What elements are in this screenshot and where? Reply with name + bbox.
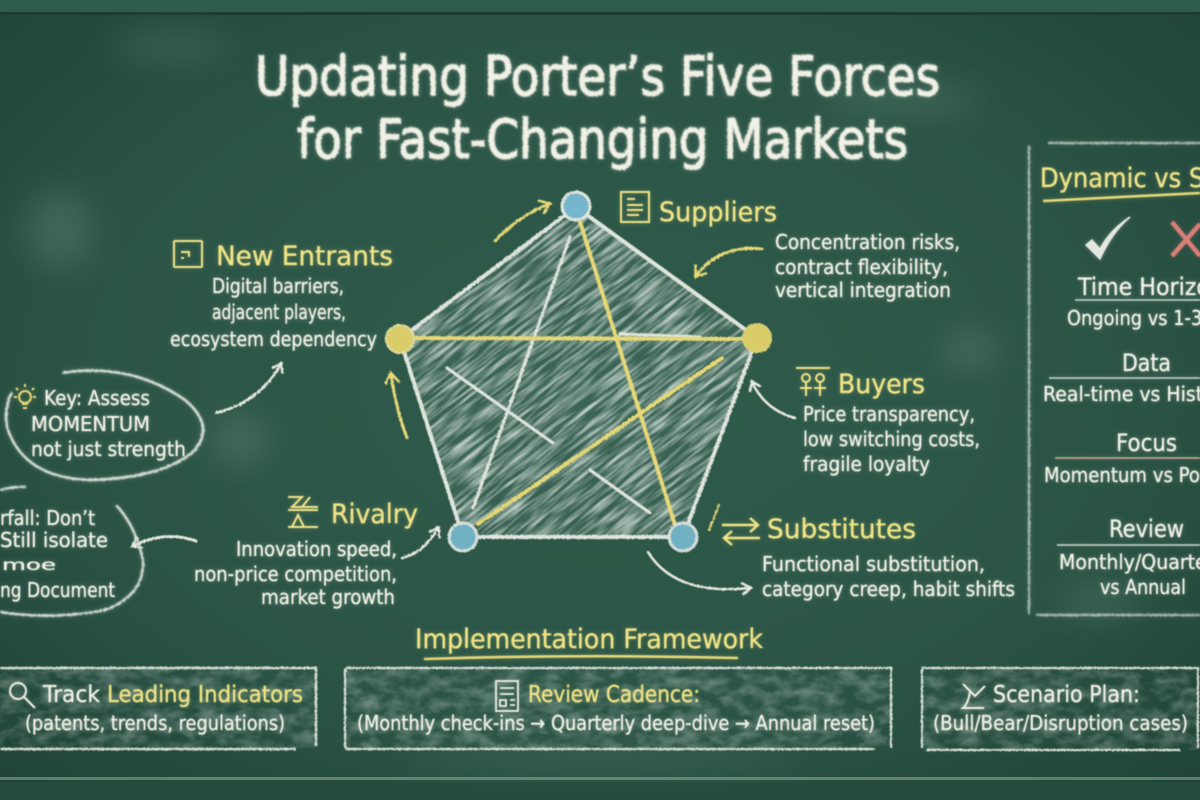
icon: document [621, 192, 649, 222]
title [255, 45, 940, 171]
row: data: Data [1122, 349, 1171, 377]
arrow: to pitfall [133, 537, 196, 546]
panel: scenario plan [922, 668, 1198, 750]
force: buyers [796, 368, 980, 476]
pentagon white outline [400, 207, 757, 537]
force: rivalry: Rivalry [331, 499, 418, 530]
force: new entrants: ecosystem dependency [170, 327, 377, 351]
panel: dynamic vs static [1029, 143, 1200, 615]
title: Updating Porter’s Five Forces [255, 45, 940, 108]
icon: check mark [1086, 217, 1130, 259]
panel: review cadence [344, 668, 892, 750]
callout: pitfall [0, 487, 143, 616]
panel: leading indicators: Leading Indicators [107, 682, 303, 708]
panel: review cadence: (Monthly check-ins → Quarterly deep-dive → Annual reset) [357, 711, 875, 735]
five forces pentagon diagram [384, 190, 773, 554]
icon: light bulb [14, 384, 36, 408]
node: right [743, 324, 771, 352]
panel: review cadence: Review Cadence: [528, 682, 700, 708]
panel: leading indicators: Track [42, 682, 101, 708]
icon: cross mark [1172, 222, 1200, 256]
force: suppliers: Concentration risks, [775, 230, 960, 254]
icon: magnifier [10, 683, 35, 708]
node: top [562, 192, 590, 220]
force: buyers: low switching costs, [803, 427, 980, 451]
icon: people [796, 368, 830, 396]
force: buyers: fragile loyalty [803, 452, 930, 476]
force: rivalry: market growth [261, 585, 395, 609]
node: left [386, 325, 414, 353]
callout: pitfall: moe [2, 556, 56, 574]
force: suppliers: contract flexibility, [775, 255, 948, 279]
force: rivalry [194, 497, 418, 609]
force: suppliers: Suppliers [659, 197, 777, 228]
heading: implementation framework: Implementation Framework [415, 624, 763, 655]
panel: leading indicators [0, 668, 317, 749]
arrow: to top node [495, 204, 549, 241]
arrow: substitutes [648, 552, 750, 589]
force: suppliers [621, 192, 960, 302]
row: review: Review [1109, 515, 1184, 543]
panel: scenario plan: Scenario Plan: [993, 682, 1140, 708]
yellow dash [709, 505, 719, 530]
arrow: key to new entrants [216, 364, 281, 413]
force: buyers: Buyers [838, 369, 925, 400]
panel: leading indicators: (patents, trends, regulations) [25, 711, 285, 735]
callout: pitfall: Still isolate [0, 528, 108, 552]
callout: pitfall: rfall: Don’t [0, 506, 95, 530]
force: substitutes [722, 514, 1015, 601]
yellow star lines [412, 222, 745, 525]
pentagon hatching [406, 218, 750, 536]
force: suppliers: vertical integration [775, 278, 951, 302]
arrow: suppliers note [696, 248, 762, 276]
icon: rivalry [288, 497, 318, 527]
callout: key momentum [6, 371, 203, 480]
icon: branching path [963, 684, 985, 708]
arrow: rivalry [402, 528, 438, 558]
force: new entrants: Digital barriers, [212, 274, 344, 298]
force: substitutes: Substitutes [767, 514, 916, 545]
callout: key momentum: MOMENTUM [31, 412, 150, 436]
arrows around the pentagon [133, 204, 795, 589]
callout: key momentum: not just strength [31, 437, 186, 461]
title: for Fast-Changing Markets [297, 108, 908, 171]
force: substitutes: category creep, habit shifts [762, 577, 1015, 601]
force: rivalry: non-price competition, [194, 562, 397, 586]
force: rivalry: Innovation speed, [236, 537, 397, 561]
arrow: to left node [391, 374, 407, 438]
icon: calendar sheet [496, 681, 518, 711]
row: focus: Focus [1116, 429, 1177, 457]
arrow: buyers [752, 382, 795, 418]
node: bottom right [669, 523, 697, 551]
force: new entrants [170, 241, 393, 351]
force: buyers: Price transparency, [803, 402, 975, 426]
icon: swap arrows [722, 518, 760, 545]
force: new entrants: New Entrants [216, 241, 393, 272]
force: new entrants: adjacent players, [212, 300, 346, 324]
callout: key momentum: Key: Assess [44, 386, 150, 410]
force: substitutes: Functional substitution, [762, 552, 985, 576]
panel: dynamic vs static: vs Annual [1100, 575, 1186, 599]
icon: new entrants [174, 241, 202, 267]
callout: pitfall: ng Document [0, 578, 115, 602]
node: bottom left [449, 523, 477, 551]
